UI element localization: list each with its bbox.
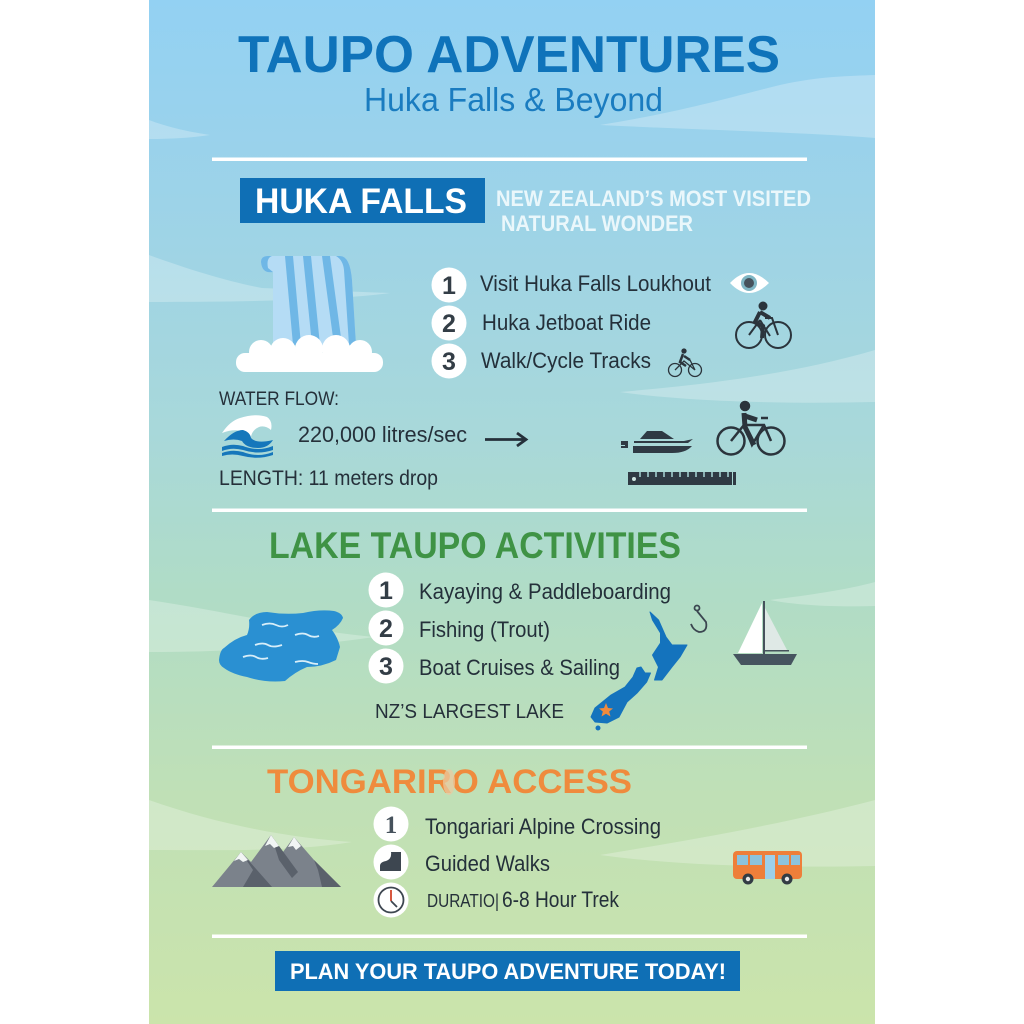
icon: eye	[730, 273, 769, 293]
icon: bus	[733, 851, 802, 884]
list: Tongariro: Guided Walks	[425, 851, 550, 876]
list: Huka activities: Walk/Cycle Tracks	[481, 348, 651, 373]
divider	[212, 934, 807, 938]
call to action banner	[275, 951, 740, 991]
divider	[212, 158, 807, 161]
icon: mountains	[212, 835, 341, 887]
list: lake activities: Fishing (Trout)	[419, 617, 550, 642]
heading: Tongariro Access: TONGARIRO ACCESS	[267, 763, 632, 801]
icon: lake	[219, 610, 343, 682]
list: Huka activities: 2	[442, 310, 456, 338]
icon: cyclist large	[736, 302, 791, 348]
list: Tongariro: 6-8 Hour Trek	[502, 887, 620, 912]
tagline: NATURAL WONDER	[501, 211, 693, 236]
list: Huka activities	[432, 268, 711, 378]
divider	[212, 746, 807, 749]
water flow value: 220,000 litres/sec	[298, 422, 467, 447]
divider	[212, 508, 807, 512]
panel: Huka Falls heading: HUKA FALLS	[255, 182, 467, 221]
icon: bicycle with rider	[718, 402, 784, 454]
list: Tongariro	[374, 806, 661, 918]
heading: Lake Taupo Activities: LAKE TAUPO ACTIVITIES	[269, 525, 681, 566]
list: lake activities: 2	[379, 615, 393, 643]
icon: ruler	[628, 472, 736, 485]
icon: sailboat	[733, 601, 797, 665]
list: Huka activities: Visit Huka Falls Loukhout	[480, 271, 711, 296]
icon: waterfall	[236, 256, 383, 372]
icon: clock	[378, 888, 404, 912]
list: Tongariro: 1	[385, 812, 397, 839]
arrow	[485, 433, 526, 446]
title: TAUPO ADVENTURES	[238, 26, 780, 84]
list: Huka activities: 3	[442, 348, 456, 376]
list: lake activities	[368, 572, 671, 684]
length label: LENGTH: 11 meters drop	[219, 467, 438, 490]
list: lake activities: Boat Cruises & Sailing	[419, 655, 620, 680]
water flow label: WATER FLOW:	[219, 389, 339, 410]
list: Huka activities: Huka Jetboat Ride	[482, 310, 651, 335]
list: lake activities: 3	[379, 653, 393, 681]
list: Huka activities: 1	[442, 272, 456, 300]
poster background	[149, 0, 875, 1024]
tagline: NEW ZEALAND’S MOST VISITED	[496, 186, 811, 211]
call to action banner: PLAN YOUR TAUPO ADVENTURE TODAY!	[290, 959, 726, 984]
subtitle: Huka Falls & Beyond	[364, 81, 663, 118]
NZ's largest lake label: NZ’S LARGEST LAKE	[375, 700, 564, 723]
icon: cyclist small	[668, 349, 702, 376]
list: lake activities: 1	[379, 577, 393, 605]
icon: New Zealand map	[591, 612, 687, 730]
list: Tongariro: Tongariari Alpine Crossing	[425, 814, 661, 839]
list: lake activities: Kayaying & Paddleboarding	[419, 579, 671, 604]
icon: fishing hook	[691, 606, 706, 632]
icon: wave	[222, 415, 273, 458]
icon: jetboat	[621, 431, 693, 453]
icon: boot	[380, 852, 401, 871]
tagline	[496, 186, 811, 236]
background clouds	[149, 75, 875, 867]
list: Tongariro: DURATIO|	[427, 891, 499, 911]
